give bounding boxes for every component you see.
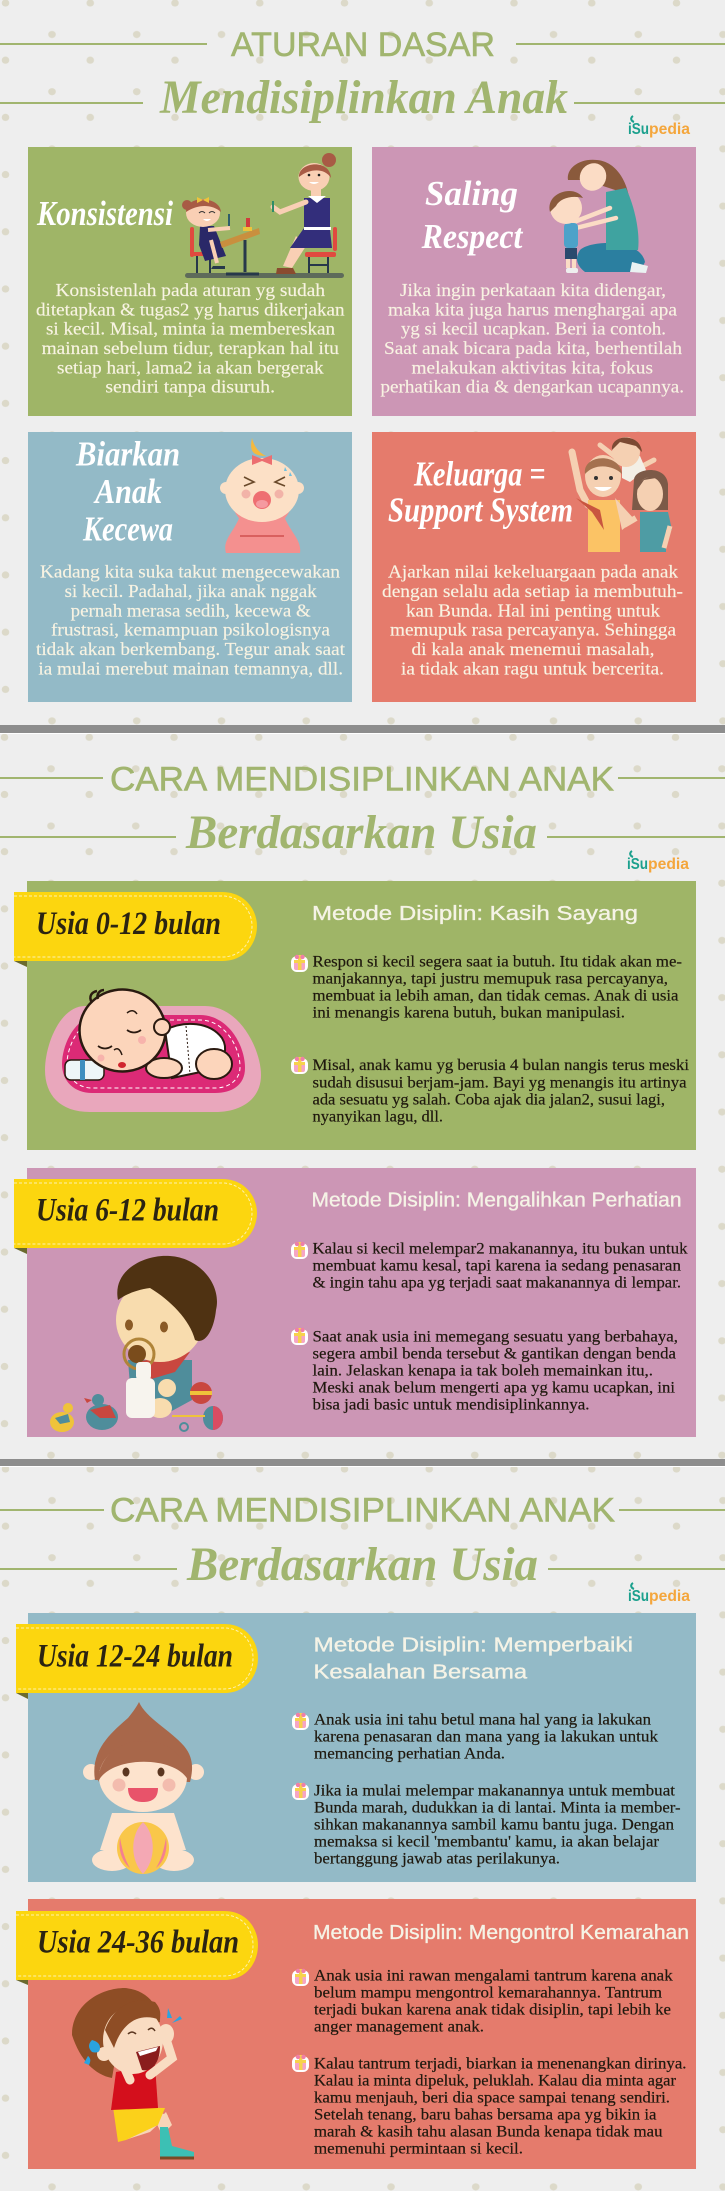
body text: Kadang kita suka takut mengecewakan bbox=[40, 562, 340, 582]
title: cara mendisiplinkan anak berdasarkan usia (1) bbox=[0, 761, 725, 859]
bullet text 1: memancing perhatian Anda. bbox=[314, 1745, 505, 1762]
polka dot background section 1 bbox=[0, 0, 725, 725]
panel: usia 6-12 bulan bbox=[14, 1168, 696, 1437]
heading: biarkan anak kecewa: Anak bbox=[93, 472, 162, 511]
bullet text 1 bbox=[312, 1240, 688, 1291]
illustration: mother and daughter at desk bbox=[182, 153, 344, 278]
illustration: family bbox=[572, 437, 672, 552]
heading: konsistensi: Konsistensi bbox=[36, 194, 173, 233]
bullet text 1: membuat ia lebih aman, dan tidak cemas. Anak di usia bbox=[312, 987, 678, 1004]
body text: memupuk rasa percayanya. Sehingga bbox=[390, 620, 676, 640]
title: cara mendisiplinkan anak berdasarkan usia (2): Berdasarkan Usia bbox=[186, 1538, 538, 1591]
body text: tidak akan berkembang. Tegur anak saat bbox=[36, 639, 345, 659]
heading: biarkan anak kecewa: Kecewa bbox=[82, 510, 173, 549]
body text: ia mulai merebut mainan temannya, dll. bbox=[38, 658, 343, 678]
divider 2 bbox=[0, 1459, 725, 1467]
bullet text 2: Misal, anak kamu yg berusia 4 bulan nangis terus meski bbox=[312, 1057, 690, 1074]
illustration: crying boy bbox=[72, 1988, 194, 2158]
heading: biarkan anak kecewa bbox=[75, 435, 180, 549]
bullet text 2: lain. Jelaskan kenapa ia tak boleh memainkan itu,. bbox=[312, 1362, 653, 1379]
bullet text 2: memenuhi permintaan si kecil. bbox=[314, 2140, 523, 2157]
bullet text 2: sihkan makanannya sambil kamu bantu juga. Dengan bbox=[314, 1816, 674, 1833]
bullet text 2: Saat anak usia ini memegang sesuatu yang berbahaya, bbox=[312, 1329, 678, 1346]
logo: isupedia bbox=[628, 116, 690, 138]
heading: saling respect: Respect bbox=[421, 217, 524, 256]
tag: usia 0-12 bulan: Usia 0-12 bulan bbox=[36, 906, 221, 942]
bullet text 1: terjadi bukan karena anak tidak disiplin, tapi lebih ke bbox=[314, 2001, 671, 2018]
body text: maka kita juga harus menghargai apa bbox=[388, 299, 677, 319]
body text bbox=[36, 280, 345, 397]
body text: ia tidak akan ragu untuk bercerita. bbox=[401, 658, 664, 678]
bullet text 1: belum mampu mengontrol kemarahannya. Tantrum bbox=[314, 1985, 663, 2002]
icon: gift bullet bbox=[292, 1783, 309, 1800]
body text: Saat anak bicara pada kita, berhentilah bbox=[384, 338, 682, 358]
body text: kan Bunda. Hal ini penting untuk bbox=[406, 600, 660, 620]
panel: biarkan anak kecewa bbox=[28, 432, 352, 702]
heading: keluarga support system: Support System bbox=[388, 491, 573, 530]
bullet text 1 bbox=[314, 1711, 658, 1762]
heading: metode disiplin kasih sayang: Metode Disiplin: Kasih Sayang bbox=[312, 903, 638, 925]
bullet text 1: manjakannya, tapi justru memupuk rasa percayanya, bbox=[312, 970, 668, 987]
title: cara mendisiplinkan anak berdasarkan usia (2) bbox=[0, 1492, 725, 1591]
body text: Konsistenlah pada aturan yg sudah bbox=[56, 280, 325, 300]
logo: isupedia: pedia bbox=[648, 856, 689, 873]
bullet text 2: marah & kasih tahu alasan Bunda kenapa tidak mau bbox=[314, 2123, 662, 2140]
bullet text 2: nyanyikan lagu, dll. bbox=[312, 1109, 443, 1126]
heading: biarkan anak kecewa: Biarkan bbox=[75, 435, 180, 474]
bullet text 2: memaksa si kecil 'membantu' kamu, ia akan belajar bbox=[314, 1834, 660, 1851]
title: cara mendisiplinkan anak berdasarkan usia (1): Berdasarkan Usia bbox=[185, 806, 537, 859]
tag: usia 6-12 bulan bbox=[14, 1179, 257, 1254]
bullet text 2: ada sesuatu yg salah. Coba ajak dia jalan2, susui lagi, bbox=[312, 1091, 665, 1108]
illustration: sleeping baby on mat bbox=[45, 990, 261, 1112]
body text: si kecil. Padahal, jika anak nggak bbox=[65, 581, 317, 601]
body text: di kala anak menemui masalah, bbox=[412, 639, 654, 659]
heading: keluarga support system: Keluarga = bbox=[413, 455, 546, 494]
body text: dengan selalu ada setiap ia membutuh- bbox=[382, 581, 683, 601]
bullet text 2: bertanggung jawab atas perilakunya. bbox=[314, 1850, 560, 1867]
icon: gift bullet bbox=[292, 2055, 309, 2072]
bullet text 2: segera ambil benda tersebut & gantikan dengan benda bbox=[312, 1345, 676, 1362]
bullet text 1: Anak usia ini rawan mengalami tantrum karena anak bbox=[314, 1968, 673, 1985]
bullet text 2 bbox=[312, 1057, 690, 1126]
icon: gift bullet bbox=[292, 1969, 309, 1986]
heading: saling respect: Saling bbox=[425, 174, 518, 213]
illustration: baby with ball bbox=[83, 1702, 204, 1874]
bullet text 2 bbox=[314, 1783, 680, 1867]
body text bbox=[382, 562, 683, 678]
logo: isupedia bbox=[628, 1583, 690, 1605]
bullet text 1: & ingin tahu apa yg terjadi saat makanannya di lempar. bbox=[312, 1274, 681, 1291]
tag: usia 0-12 bulan bbox=[14, 892, 257, 967]
bullet text 2: Meski anak belum mengerti apa yg kamu ucapkan, ini bbox=[312, 1379, 676, 1396]
tag: usia 12-24 bulan: Usia 12-24 bulan bbox=[37, 1639, 233, 1675]
bullet text 1: membuat kamu kesal, tapi karena ia sedang penasaran bbox=[312, 1257, 681, 1274]
icon: gift bullet bbox=[291, 1057, 308, 1074]
title: aturan dasar mendisiplinkan anak: ATURAN DASAR bbox=[231, 26, 495, 64]
body text: frustrasi, kemampuan psikologisnya bbox=[51, 620, 330, 640]
heading: metode disiplin memperbaiki kesalahan bersama bbox=[314, 1635, 633, 1683]
logo: isupedia: iSu bbox=[628, 1588, 649, 1605]
panel: keluarga support system bbox=[372, 432, 696, 702]
panel: usia 0-12 bulan bbox=[14, 881, 696, 1150]
bullet text 1: anger management anak. bbox=[314, 2019, 484, 2036]
polka dot background section 3 bbox=[0, 1466, 725, 2191]
polka dot background section 2 bbox=[0, 733, 725, 1459]
title: aturan dasar mendisiplinkan anak: Mendisiplinkan Anak bbox=[159, 71, 568, 124]
title: cara mendisiplinkan anak berdasarkan usia (1): CARA MENDISIPLINKAN ANAK bbox=[110, 761, 614, 799]
body text: perhatikan dia & dengarkan ucapannya. bbox=[380, 377, 684, 397]
icon: gift bullet bbox=[291, 955, 308, 972]
divider 1 bbox=[0, 725, 725, 734]
bullet text 2: Kalau tantrum terjadi, biarkan ia menenangkan dirinya. bbox=[314, 2056, 686, 2073]
illustration: baby with bottle and toys bbox=[50, 1256, 223, 1432]
bullet text 2: Jika ia mulai melempar makanannya untuk membuat bbox=[314, 1783, 676, 1800]
body text: Ajarkan nilai kekeluargaan pada anak bbox=[388, 562, 678, 582]
heading: saling respect bbox=[421, 174, 524, 256]
panel: konsistensi bbox=[28, 147, 352, 416]
tag: usia 6-12 bulan: Usia 6-12 bulan bbox=[36, 1193, 219, 1229]
illustration: mother and son bbox=[549, 158, 648, 273]
title: cara mendisiplinkan anak berdasarkan usia (2): CARA MENDISIPLINKAN ANAK bbox=[110, 1492, 615, 1530]
tag: usia 24-36 bulan bbox=[16, 1911, 258, 1985]
panel: saling respect bbox=[372, 147, 696, 416]
logo: isupedia: pedia bbox=[649, 1588, 690, 1605]
body text: yg si kecil ucapkan. Beri ia contoh. bbox=[401, 319, 666, 339]
heading: metode disiplin mengontrol kemarahan: Metode Disiplin: Mengontrol Kemarahan bbox=[313, 1922, 689, 1944]
heading: keluarga support system bbox=[388, 455, 573, 530]
body text bbox=[36, 562, 345, 678]
body text: si kecil. Misal, minta ia membereskan bbox=[46, 319, 335, 339]
title: aturan dasar mendisiplinkan anak bbox=[0, 26, 725, 124]
body text: Jika ingin perkataan kita didengar, bbox=[400, 280, 666, 300]
bullet text 1: ini menangis karena butuh, bukan manipulasi. bbox=[312, 1004, 625, 1021]
bullet text 2 bbox=[314, 2056, 686, 2157]
illustration: crying baby bbox=[220, 438, 304, 553]
panel: usia 12-24 bulan bbox=[16, 1613, 696, 1882]
bullet text 2: Kalau ia minta dipeluk, peluklah. Kalau dia minta agar bbox=[314, 2073, 677, 2090]
bullet text 2: Bunda marah, dudukkan ia di lantai. Minta ia member- bbox=[314, 1800, 680, 1817]
bullet text 2: Setelah tenang, baru bahas bersama apa yg bikin ia bbox=[314, 2106, 656, 2123]
bullet text 1 bbox=[312, 954, 682, 1021]
heading: metode disiplin memperbaiki kesalahan bersama: Metode Disiplin: Memperbaiki bbox=[314, 1635, 633, 1657]
icon: gift bullet bbox=[292, 1713, 309, 1730]
logo: isupedia: iSu bbox=[628, 121, 649, 138]
logo: isupedia: pedia bbox=[649, 121, 690, 138]
logo: isupedia: iSu bbox=[627, 856, 648, 873]
bullet text 2: bisa jadi basic untuk mendisiplinkannya. bbox=[312, 1396, 590, 1413]
heading: metode disiplin memperbaiki kesalahan bersama: Kesalahan Bersama bbox=[314, 1661, 528, 1683]
body text: pernah merasa sedih, kecewa & bbox=[71, 600, 311, 620]
logo: isupedia bbox=[627, 851, 689, 873]
body text: melakukan aktivitas kita, fokus bbox=[412, 357, 653, 377]
tag: usia 12-24 bulan bbox=[16, 1624, 258, 1699]
heading: metode disiplin mengalihkan perhatian: Metode Disiplin: Mengalihkan Perhatian bbox=[312, 1190, 682, 1212]
icon: gift bullet bbox=[291, 1242, 308, 1259]
bullet text 1: karena penasaran dan mana yang ia lakukan untuk bbox=[314, 1728, 658, 1745]
body text: sendiri tanpa disuruh. bbox=[105, 377, 275, 397]
body text bbox=[380, 280, 684, 397]
panel: usia 24-36 bulan bbox=[16, 1899, 696, 2169]
bullet text 1: Kalau si kecil melempar2 makanannya, itu bukan untuk bbox=[312, 1240, 688, 1257]
tag: usia 24-36 bulan: Usia 24-36 bulan bbox=[37, 1925, 239, 1961]
icon: gift bullet bbox=[291, 1328, 308, 1345]
bullet text 2: kamu menjauh, beri dia space sampai tenang sendiri. bbox=[314, 2090, 670, 2107]
bullet text 2: sudah disusui berjam-jam. Bayi yg menangis itu artinya bbox=[312, 1074, 686, 1091]
bullet text 2 bbox=[312, 1329, 678, 1413]
bullet text 1: Respon si kecil segera saat ia butuh. Itu tidak akan me- bbox=[312, 954, 682, 971]
bullet text 1 bbox=[314, 1968, 673, 2036]
body text: setiap hari, lama2 ia akan bergerak bbox=[57, 357, 324, 377]
body text: mainan sebelum tidur, terapkan hal itu bbox=[42, 338, 339, 358]
body text: ditetapkan & tugas2 yg harus dikerjakan bbox=[36, 299, 345, 319]
bullet text 1: Anak usia ini tahu betul mana hal yang ia lakukan bbox=[314, 1711, 651, 1728]
